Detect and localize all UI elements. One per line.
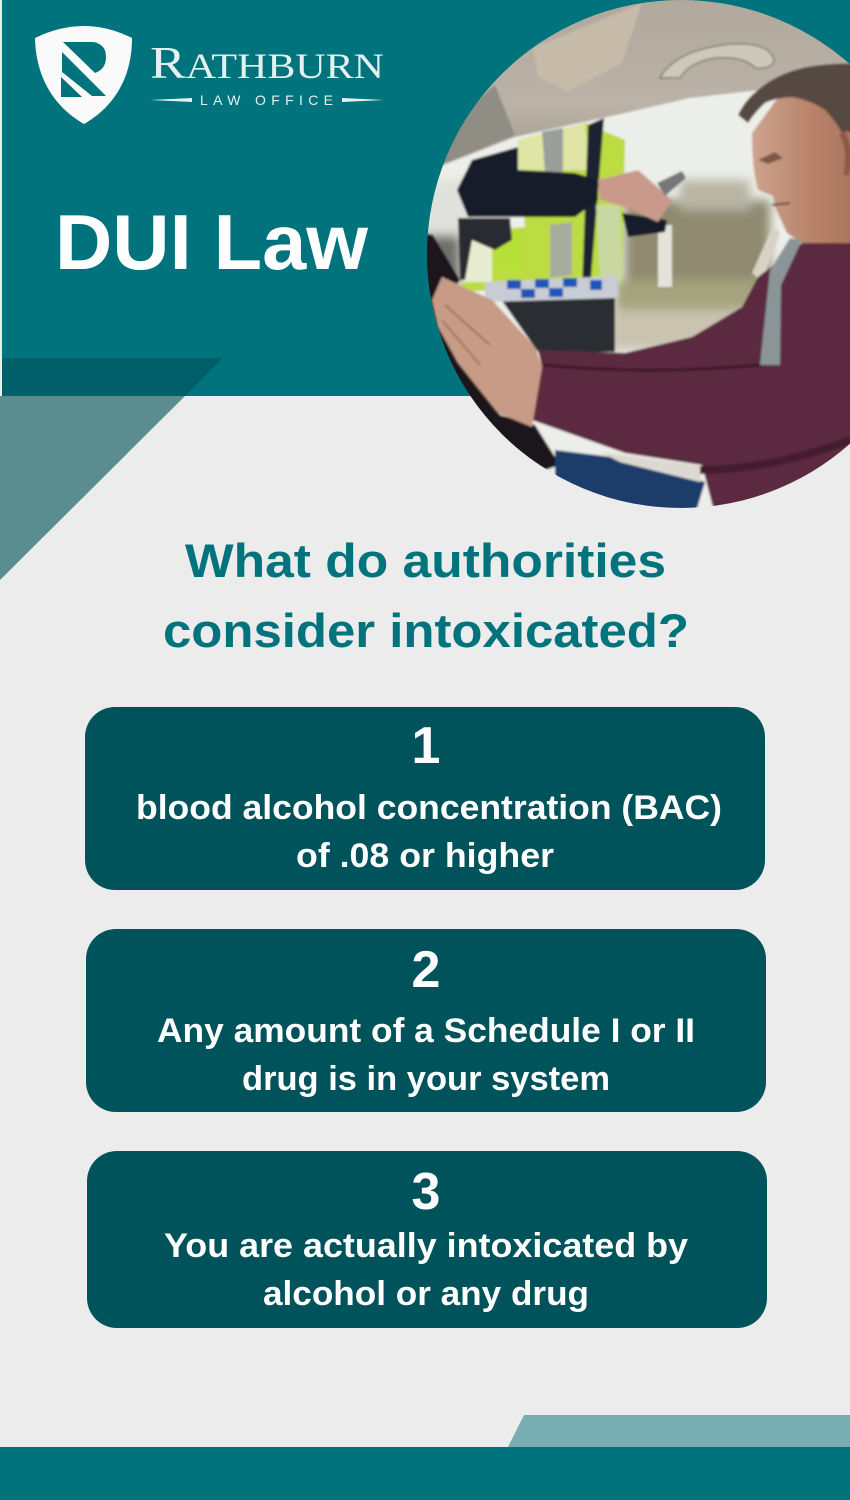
heading	[163, 534, 689, 657]
grab handle	[660, 44, 774, 78]
card 1	[85, 707, 765, 890]
steering wheel	[420, 232, 560, 470]
card 1: blood alcohol concentration (BAC)	[136, 789, 722, 827]
icon: shield logo	[35, 26, 132, 124]
heading: consider intoxicated?	[163, 604, 689, 657]
card 3: alcohol or any drug	[263, 1275, 589, 1313]
officer vest	[462, 123, 625, 292]
officer sleeve	[457, 147, 598, 217]
car ceiling	[443, 0, 850, 166]
officer equipment	[458, 218, 512, 280]
card 3: You are actually intoxicated by	[164, 1227, 688, 1265]
photo: officer beside driver in car	[410, 0, 850, 520]
logo wordmark: RATHBURN	[150, 37, 384, 88]
logo	[35, 26, 384, 124]
sun visor	[533, 3, 642, 92]
man's sweater	[532, 243, 850, 520]
card 2: Any amount of a Schedule I or II	[157, 1012, 695, 1050]
man's head	[752, 90, 850, 250]
card 1: 1	[412, 717, 440, 775]
card 3: 3	[412, 1163, 440, 1221]
background trees	[420, 180, 775, 350]
decorative triangle	[0, 358, 223, 580]
jeans	[555, 450, 705, 515]
footer band	[0, 1415, 850, 1500]
card 3	[87, 1151, 767, 1328]
officer checked belt	[485, 276, 618, 302]
logo tagline: LAW OFFICE	[200, 92, 333, 108]
seat	[752, 228, 780, 282]
card 1: of .08 or higher	[296, 837, 554, 875]
header panel	[2, 0, 850, 396]
officer hand and phone	[598, 170, 672, 222]
card 2: drug is in your system	[242, 1060, 610, 1098]
man's hand	[432, 277, 542, 427]
card 2	[86, 929, 766, 1112]
card 2: 2	[412, 941, 440, 999]
officer trousers	[500, 298, 615, 352]
logo tagline	[150, 92, 384, 108]
seat belt	[760, 238, 802, 365]
title: DUI Law	[55, 198, 368, 286]
heading: What do authorities	[185, 534, 666, 587]
